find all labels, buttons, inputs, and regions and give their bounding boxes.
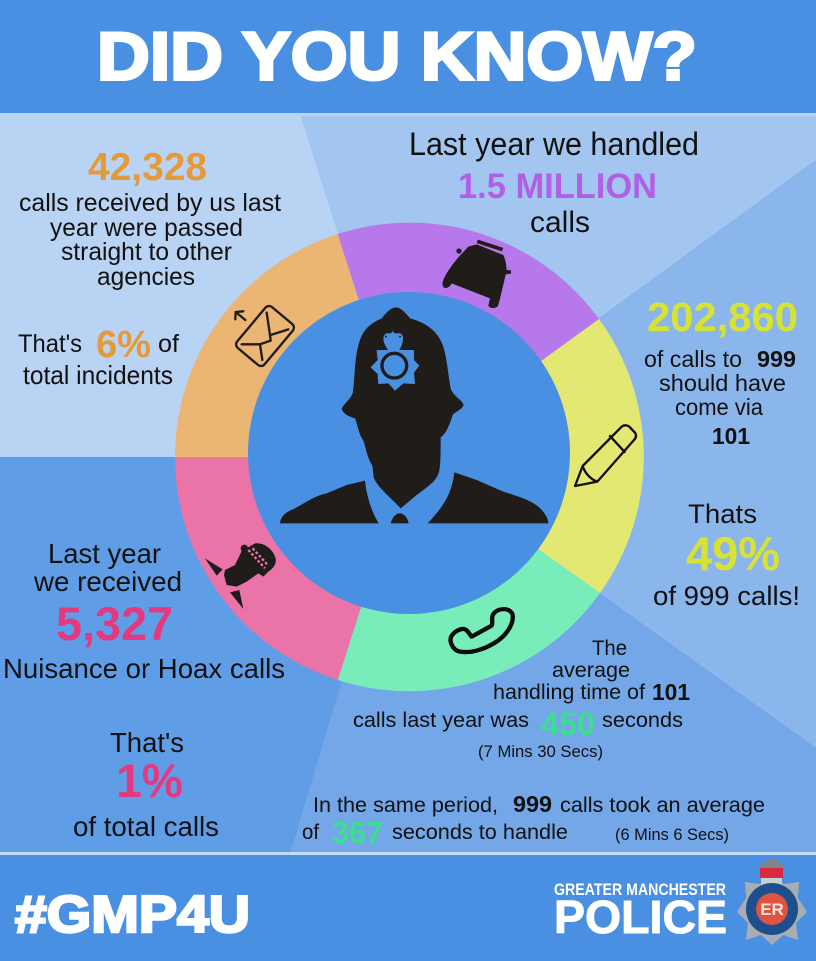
panel: hoax calls text: That's bbox=[110, 727, 184, 758]
panel: 999 misuse text: of 999 calls! bbox=[653, 581, 800, 611]
panel: handling time text: The bbox=[592, 636, 627, 660]
icon: megaphone bbox=[205, 543, 276, 609]
panel: hoax calls text: of total calls bbox=[73, 811, 219, 842]
icon: helmet badge bbox=[371, 331, 419, 391]
panel: passed to other agencies text: That's bbox=[18, 330, 82, 358]
panel: hoax calls text: Last year bbox=[48, 538, 161, 569]
panel: handling time text: (6 Mins 6 Secs) bbox=[615, 826, 729, 844]
logo: Greater Manchester Police: GREATER MANCHESTER bbox=[554, 881, 726, 899]
panel: handling time text: seconds bbox=[602, 708, 683, 732]
panel: handling time text: of bbox=[302, 820, 319, 844]
panel: calls handled text: calls bbox=[530, 206, 590, 239]
icon: police officer silhouette bbox=[280, 307, 548, 523]
panel: passed to other agencies text: 42,328 bbox=[88, 146, 207, 189]
inner circle bbox=[248, 292, 570, 614]
panel: handling time text: 367 bbox=[332, 815, 383, 850]
panel: passed to other agencies text: total incidents bbox=[23, 360, 173, 390]
icon: police crest: ER bbox=[760, 900, 784, 919]
panel: passed to other agencies text: of bbox=[158, 330, 179, 358]
panel: 999 misuse text: 49% bbox=[686, 527, 780, 580]
panel: 999 misuse text: come via bbox=[675, 394, 763, 420]
ring chart bbox=[175, 223, 644, 691]
panel: passed to other agencies text: agencies bbox=[97, 263, 195, 291]
panel: 999 misuse text: of calls to bbox=[644, 346, 742, 372]
panel: handling time text bbox=[302, 636, 765, 850]
panel: passed to other agencies text: 6% bbox=[96, 324, 151, 366]
panel: handling time text: 999 bbox=[513, 791, 552, 817]
hashtag: #GMP4U bbox=[15, 886, 250, 944]
panel: handling time text: average bbox=[552, 658, 630, 682]
logo: Greater Manchester Police: POLICE bbox=[554, 891, 727, 943]
panel: hoax calls text bbox=[3, 538, 285, 842]
panel: handling time text: calls took an average bbox=[560, 793, 765, 817]
panel: hoax calls text: 5,327 bbox=[56, 597, 173, 650]
panel: passed to other agencies text: year were passed bbox=[50, 214, 243, 242]
panel: handling time text: calls last year was bbox=[353, 708, 529, 732]
panel: calls handled text: 1.5 MILLION bbox=[458, 167, 657, 206]
panel: handling time text: (7 Mins 30 Secs) bbox=[478, 743, 603, 761]
panel: hoax calls text: 1% bbox=[116, 754, 183, 807]
panel: handling time text: 101 bbox=[652, 679, 690, 705]
panel: 999 misuse text: 999 bbox=[757, 346, 796, 372]
panel: passed to other agencies text: straight to other bbox=[61, 238, 232, 266]
panel: hoax calls text: Nuisance or Hoax calls bbox=[3, 653, 285, 684]
icon: pencil bbox=[575, 425, 636, 486]
panel: passed to other agencies text bbox=[18, 146, 281, 390]
panel: calls handled text: Last year we handled bbox=[409, 126, 699, 162]
panel: 999 misuse text bbox=[644, 294, 800, 611]
logo: Greater Manchester Police bbox=[554, 858, 807, 945]
panel: 999 misuse text: 202,860 bbox=[647, 294, 798, 340]
icon: envelope bbox=[234, 304, 296, 368]
panel: handling time text: 450 bbox=[541, 706, 595, 742]
icon: police crest bbox=[737, 858, 807, 945]
panel: 999 misuse text: 101 bbox=[712, 423, 750, 449]
panel: handling time text: seconds to handle bbox=[392, 820, 568, 844]
panel: handling time text: In the same period, bbox=[313, 793, 498, 817]
panel: 999 misuse text: Thats bbox=[688, 499, 757, 529]
icon: police car bbox=[443, 240, 511, 308]
panel: hoax calls text: we received bbox=[33, 566, 182, 597]
panel: calls handled text bbox=[409, 126, 699, 239]
panel: passed to other agencies text: calls received by us last bbox=[19, 189, 281, 217]
icon: telephone bbox=[450, 609, 513, 652]
panel: handling time text: handling time of bbox=[493, 680, 645, 704]
panel: 999 misuse text: should have bbox=[659, 370, 786, 396]
title: DID YOU KNOW? bbox=[97, 18, 697, 94]
